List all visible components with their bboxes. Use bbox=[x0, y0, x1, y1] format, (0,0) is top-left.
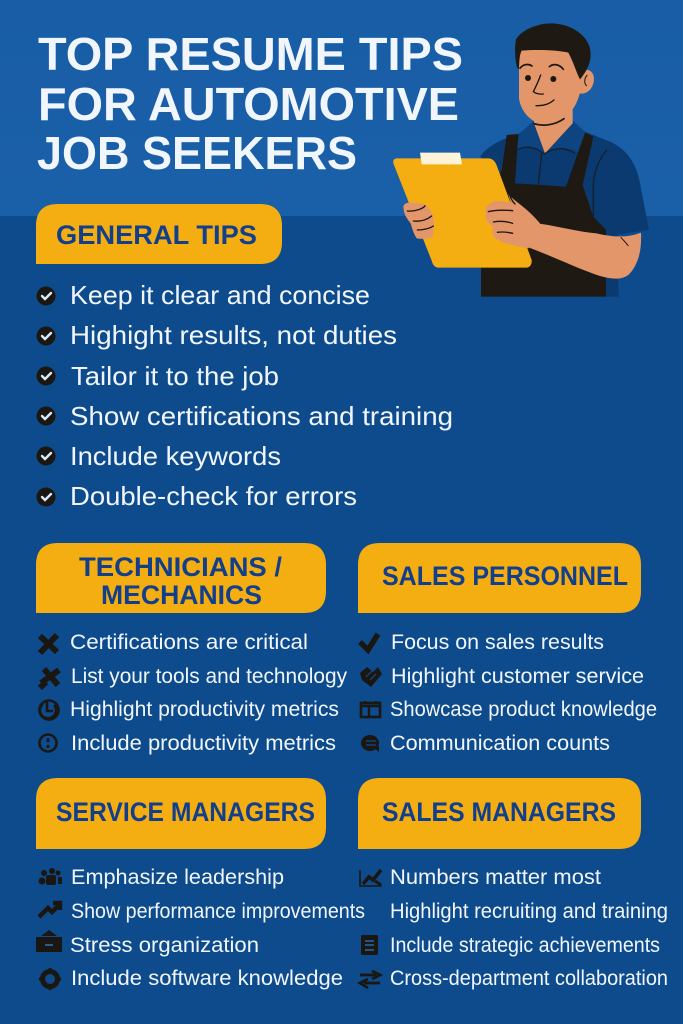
list: general tips: Show certifications and training bbox=[70, 401, 453, 431]
panel: sales managers heading bbox=[358, 778, 641, 849]
list: service managers: Emphasize leadership bbox=[71, 866, 284, 889]
panel: sales personnel heading bbox=[358, 543, 641, 613]
list: sales personnel: Communication counts bbox=[390, 732, 610, 755]
title: TOP RESUME TIPS bbox=[38, 28, 463, 80]
list: technicians: List your tools and technology bbox=[71, 665, 347, 688]
icon: briefcase bbox=[36, 930, 62, 952]
list: service managers: Show performance improvements bbox=[71, 900, 365, 923]
list: general tips: Include keywords bbox=[70, 441, 281, 471]
list: service managers bbox=[36, 866, 365, 990]
list: sales managers bbox=[360, 866, 668, 990]
illustration: mechanic holding clipboard bbox=[393, 23, 649, 297]
list: service managers: Include software knowledge bbox=[71, 967, 343, 990]
list: sales personnel bbox=[360, 631, 657, 755]
list: sales managers: Cross-department collaboration bbox=[390, 967, 668, 990]
list: technicians: Include productivity metrics bbox=[71, 732, 336, 755]
icon: rising arrow bbox=[39, 903, 60, 917]
title: JOB SEEKERS bbox=[37, 127, 357, 179]
icon: chart bbox=[360, 870, 382, 886]
icon: document bbox=[361, 935, 378, 955]
icon: gear bbox=[39, 968, 61, 990]
title: FOR AUTOMOTIVE bbox=[38, 78, 459, 130]
list: service managers: Stress organization bbox=[70, 934, 259, 957]
list: sales managers: Highlight recruiting and training bbox=[390, 900, 668, 923]
icon: handshake bbox=[360, 667, 382, 687]
icon: wrench bbox=[40, 669, 59, 688]
list: general tips: Tailor it to the job bbox=[71, 361, 279, 391]
panel: general tips heading bbox=[36, 204, 282, 264]
panel: service managers heading: SERVICE MANAGERS bbox=[56, 797, 315, 827]
icon: gauge circle bbox=[40, 700, 58, 720]
panel: service managers heading bbox=[36, 778, 326, 849]
list: sales personnel: Focus on sales results bbox=[391, 631, 604, 654]
list: sales personnel: Highlight customer service bbox=[391, 665, 644, 688]
icon: calendar bbox=[361, 701, 380, 717]
icon: crossed tools bbox=[40, 635, 57, 653]
panel: technicians heading bbox=[36, 543, 326, 613]
panel: sales personnel heading: SALES PERSONNEL bbox=[382, 561, 628, 591]
icon: info circle bbox=[40, 734, 56, 752]
list: sales managers: Numbers matter most bbox=[390, 866, 601, 889]
icon: swap arrows bbox=[360, 971, 380, 988]
panel: sales managers heading: SALES MANAGERS bbox=[382, 797, 616, 827]
icon: check mark bbox=[360, 634, 378, 650]
list: general tips: Highight results, not duties bbox=[70, 320, 397, 350]
list: technicians bbox=[40, 631, 347, 755]
icon: speech bubble bbox=[361, 735, 379, 752]
list: technicians: Certifications are critical bbox=[70, 631, 308, 654]
list: technicians: Highlight productivity metrics bbox=[70, 698, 339, 721]
panel: technicians heading: MECHANICS bbox=[101, 580, 262, 610]
panel: technicians heading: TECHNICIANS / bbox=[79, 552, 282, 582]
title bbox=[37, 28, 463, 179]
list: general tips bbox=[36, 280, 453, 511]
list: general tips: Double-check for errors bbox=[70, 481, 357, 511]
panel: general tips heading: GENERAL TIPS bbox=[56, 220, 257, 250]
head bbox=[519, 43, 581, 125]
list: sales personnel: Showcase product knowledge bbox=[390, 698, 657, 721]
icon: team bbox=[38, 868, 62, 885]
list: general tips: Keep it clear and concise bbox=[70, 280, 370, 310]
list: sales managers: Include strategic achievements bbox=[390, 934, 660, 957]
